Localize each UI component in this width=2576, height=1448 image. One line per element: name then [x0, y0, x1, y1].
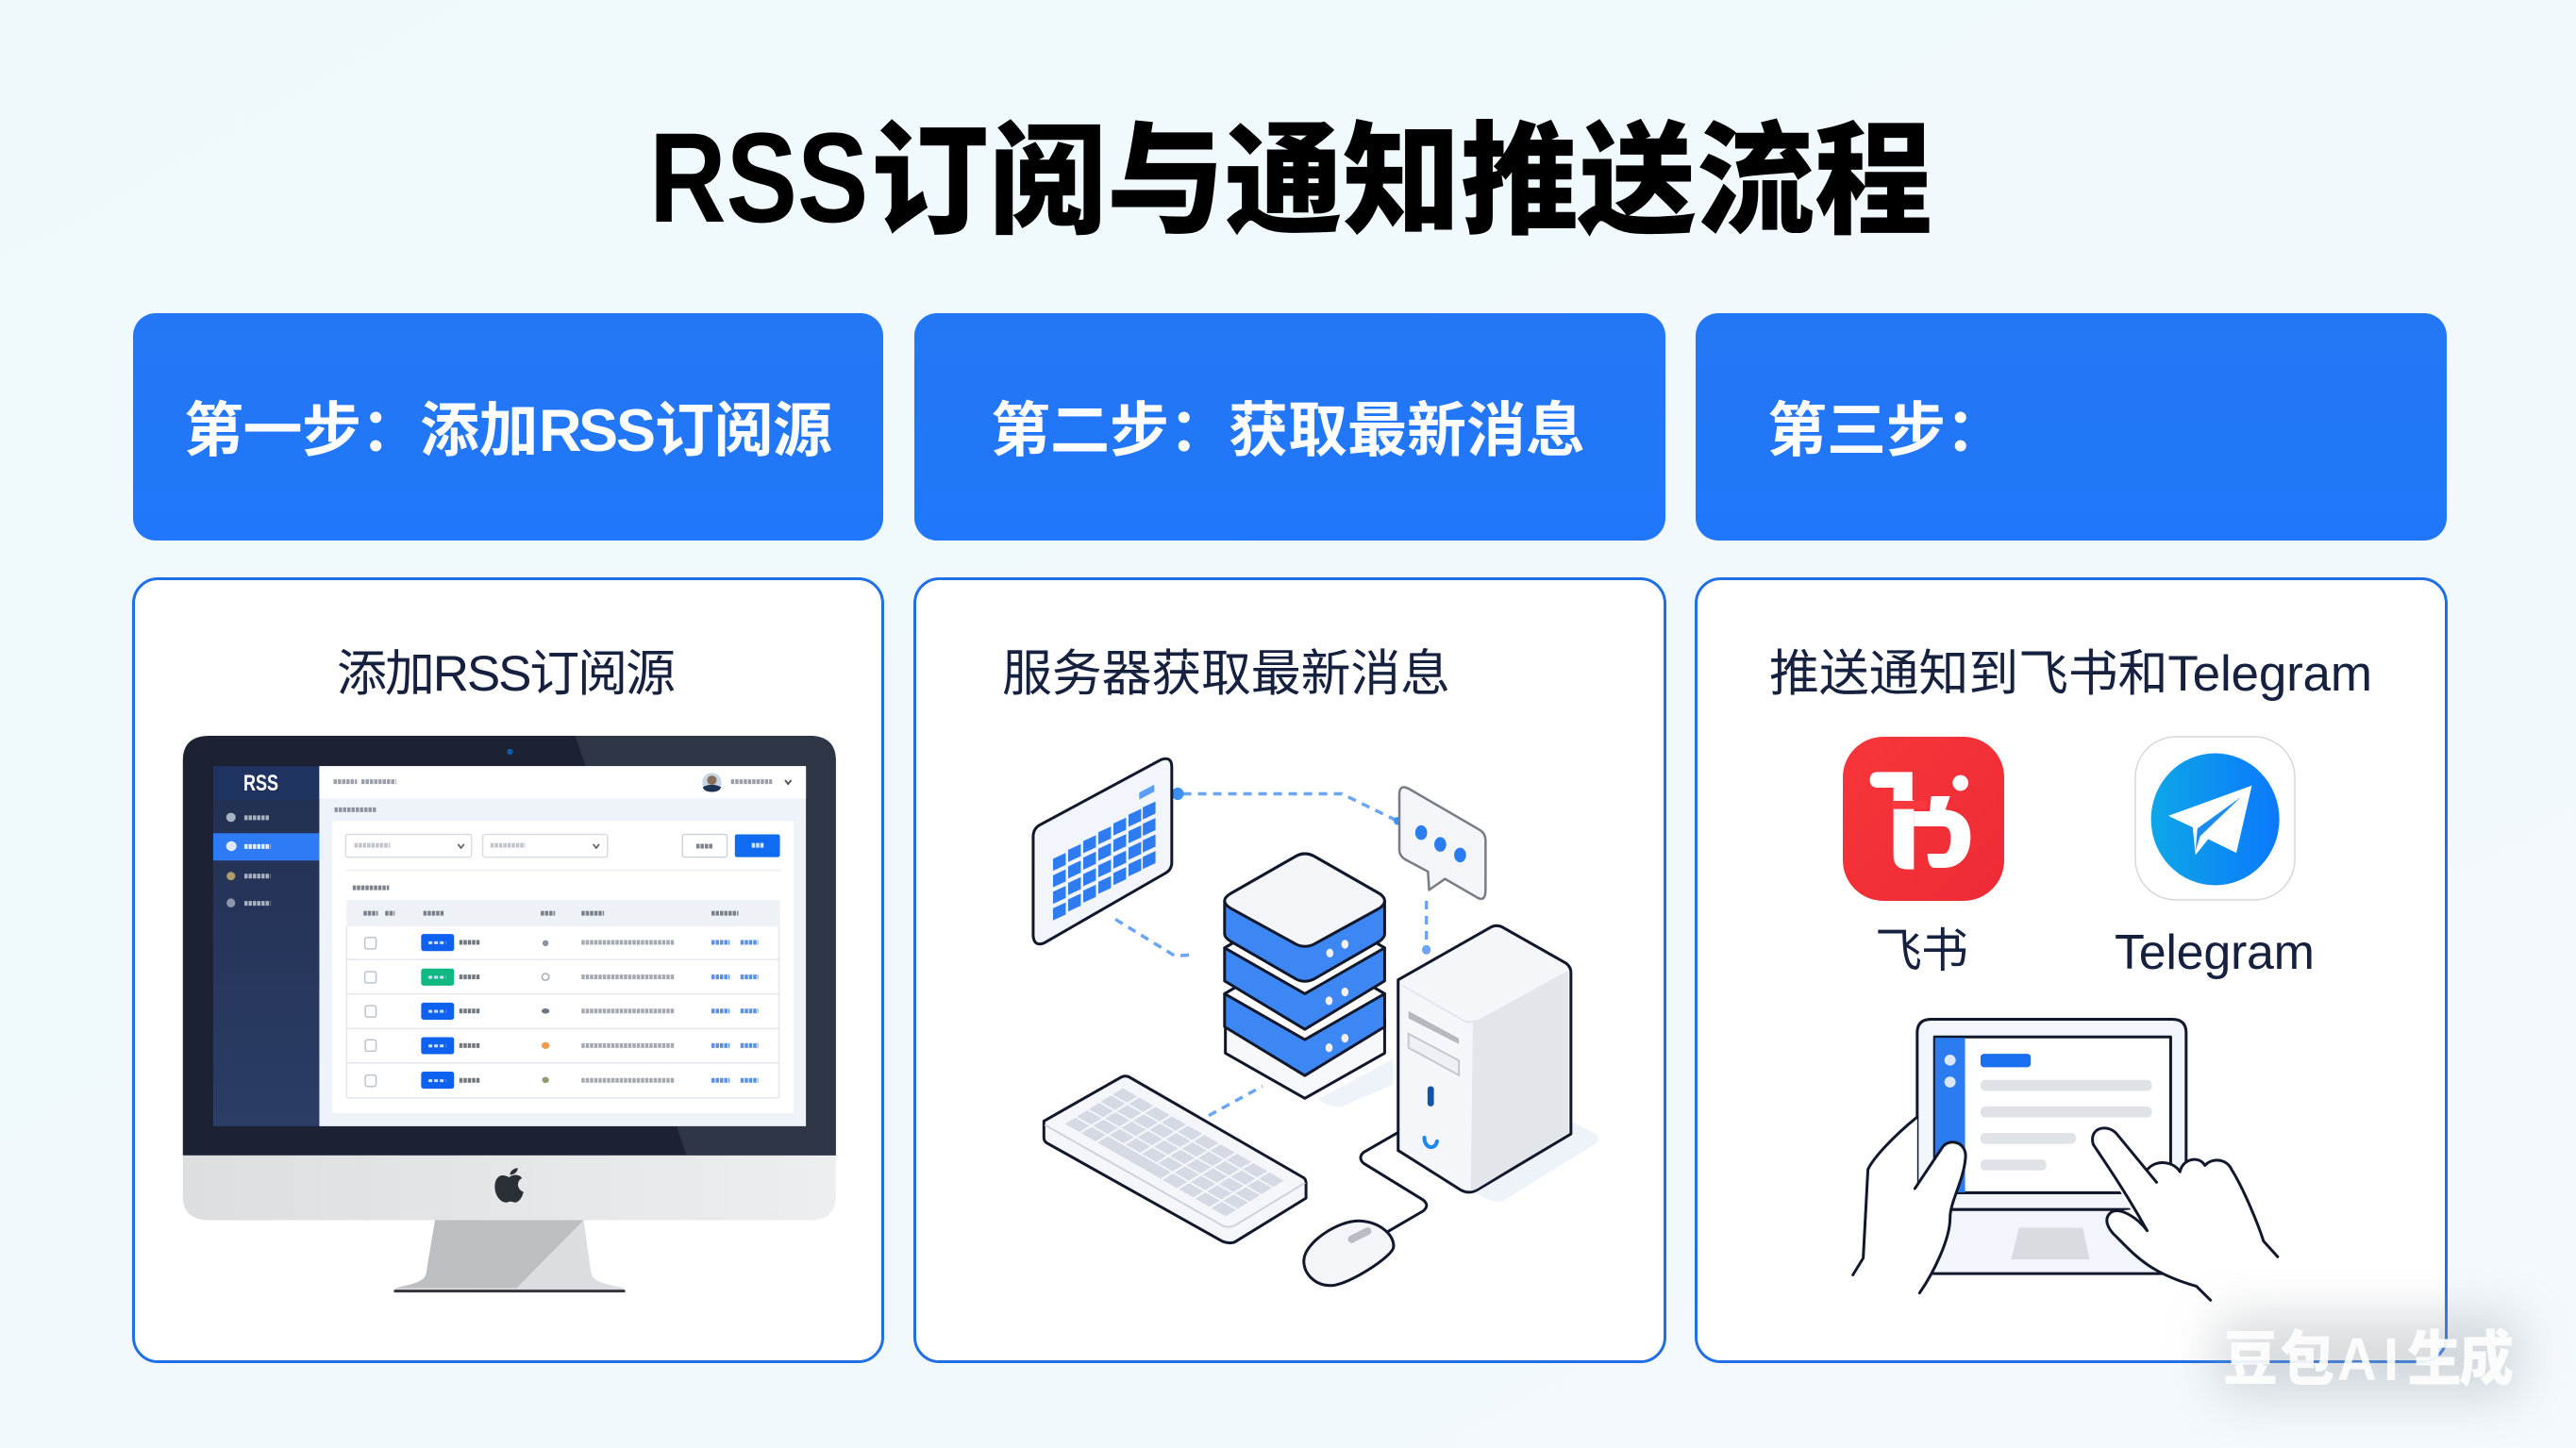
step 3 header: 第三步：	[1767, 398, 2005, 464]
chat bubble	[1399, 787, 1485, 899]
tablet panel with blue cells	[1033, 758, 1172, 944]
step 3 header	[1696, 313, 2447, 541]
label: Telegram: Telegram	[2115, 925, 2315, 980]
step 1 header	[133, 313, 883, 541]
illustration: hands using a laptop	[1853, 1020, 2278, 1300]
step 2 header: 第二步：获取最新消息	[991, 398, 1585, 464]
panel: push notifications	[1697, 579, 2446, 1362]
shadows	[1318, 1058, 1598, 1202]
keyboard	[1044, 1076, 1306, 1243]
title: 订阅与通知推送流程	[871, 114, 1932, 251]
tower computer	[1398, 925, 1571, 1192]
watermark: 豆包AI生成	[2223, 1325, 2514, 1393]
laptop	[1917, 1020, 2186, 1273]
panel 1 heading: 添加RSS订阅源	[337, 646, 676, 702]
panel 3 heading: 推送通知到飞书和Telegram	[1769, 646, 2372, 702]
title: RSS	[649, 107, 868, 249]
right hand	[2093, 1128, 2278, 1300]
panel: server fetches latest messages	[915, 579, 1664, 1362]
illustration: desktop monitor with RSS admin page	[183, 736, 836, 1291]
icon: Feishu app	[1843, 737, 2004, 901]
cable	[1361, 1133, 1427, 1233]
dashed connectors	[1115, 788, 1430, 1116]
icon: Telegram app	[2135, 737, 2295, 900]
step 1 header: 第一步：添加RSS订阅源	[184, 398, 832, 464]
label: Feishu: 飞书	[1875, 924, 1968, 977]
panel: add RSS source	[134, 579, 883, 1362]
database stack	[1225, 854, 1384, 1098]
left hand	[1853, 1117, 1965, 1293]
illustration: isometric server setup	[1033, 758, 1598, 1286]
mouse	[1304, 1221, 1394, 1286]
step 2 header	[914, 313, 1665, 541]
screen label: RSS	[243, 771, 278, 796]
panel 2 heading: 服务器获取最新消息	[1002, 646, 1450, 702]
